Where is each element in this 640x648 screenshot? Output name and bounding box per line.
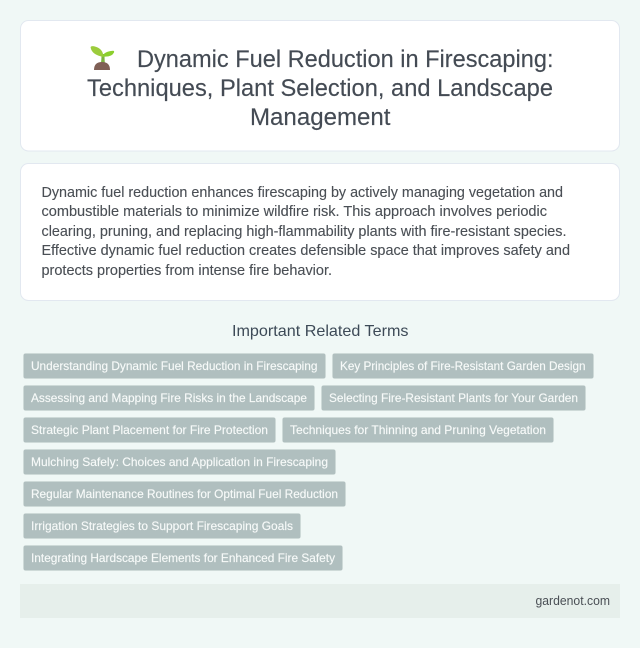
- tag: assessing fire risks: Assessing and Mapping Fire Risks in the Landscape: [31, 391, 307, 405]
- title text: [87, 46, 554, 131]
- tag: irrigation: [24, 514, 300, 538]
- description text: Dynamic fuel reduction enhances firescaping by actively managing vegetation and: [42, 185, 563, 201]
- tag: thinning and pruning: Techniques for Thinning and Pruning Vegetation: [290, 423, 546, 437]
- tag: mulching: [24, 450, 336, 474]
- description text: clearing, pruning, and replacing high-flammability plants with fire-resistant species.: [42, 224, 566, 240]
- footer bar: [20, 584, 620, 618]
- tag: understanding dynamic fuel reduction: [24, 354, 326, 378]
- tag: mulching: Mulching Safely: Choices and Application in Firescaping: [31, 455, 328, 469]
- tag: thinning and pruning: [282, 418, 554, 442]
- panel: title card: [20, 20, 620, 151]
- tag: strategic placement: [24, 418, 276, 442]
- tag: maintenance: [24, 482, 346, 506]
- tag: irrigation: Irrigation Strategies to Support Firescaping Goals: [31, 519, 293, 533]
- panel: related term tags: [24, 354, 594, 570]
- tag: key principles: [332, 354, 594, 378]
- tag: understanding dynamic fuel reduction: Understanding Dynamic Fuel Reduction in Firescaping: [31, 359, 318, 373]
- title text: Techniques, Plant Selection, and Landscape: [87, 75, 553, 102]
- panel: description card: [20, 164, 620, 300]
- tag: selecting plants: [322, 386, 586, 410]
- title text: Dynamic Fuel Reduction in Firescaping:: [137, 46, 554, 73]
- tag: maintenance: Regular Maintenance Routines for Optimal Fuel Reduction: [31, 487, 338, 501]
- icon: seedling: [91, 46, 114, 70]
- tag: selecting plants: Selecting Fire-Resistant Plants for Your Garden: [329, 391, 578, 405]
- description text: protects properties from intense fire behavior.: [42, 263, 332, 279]
- tag: assessing fire risks: [24, 386, 314, 410]
- description text: Effective dynamic fuel reduction creates defensible space that improves safety and: [42, 243, 570, 259]
- tag: hardscape: [24, 546, 342, 570]
- description text: combustible materials to minimize wildfire risk. This approach involves periodic: [42, 204, 547, 220]
- tag: hardscape: Integrating Hardscape Elements for Enhanced Fire Safety: [31, 551, 335, 565]
- tag: key principles: Key Principles of Fire-Resistant Garden Design: [340, 359, 586, 373]
- title text: Management: [250, 104, 391, 131]
- description text: [42, 185, 570, 279]
- footer bar: gardenot.com: [536, 593, 610, 608]
- tag: strategic placement: Strategic Plant Placement for Fire Protection: [31, 423, 268, 437]
- heading: important related terms: Important Related Terms: [232, 323, 408, 340]
